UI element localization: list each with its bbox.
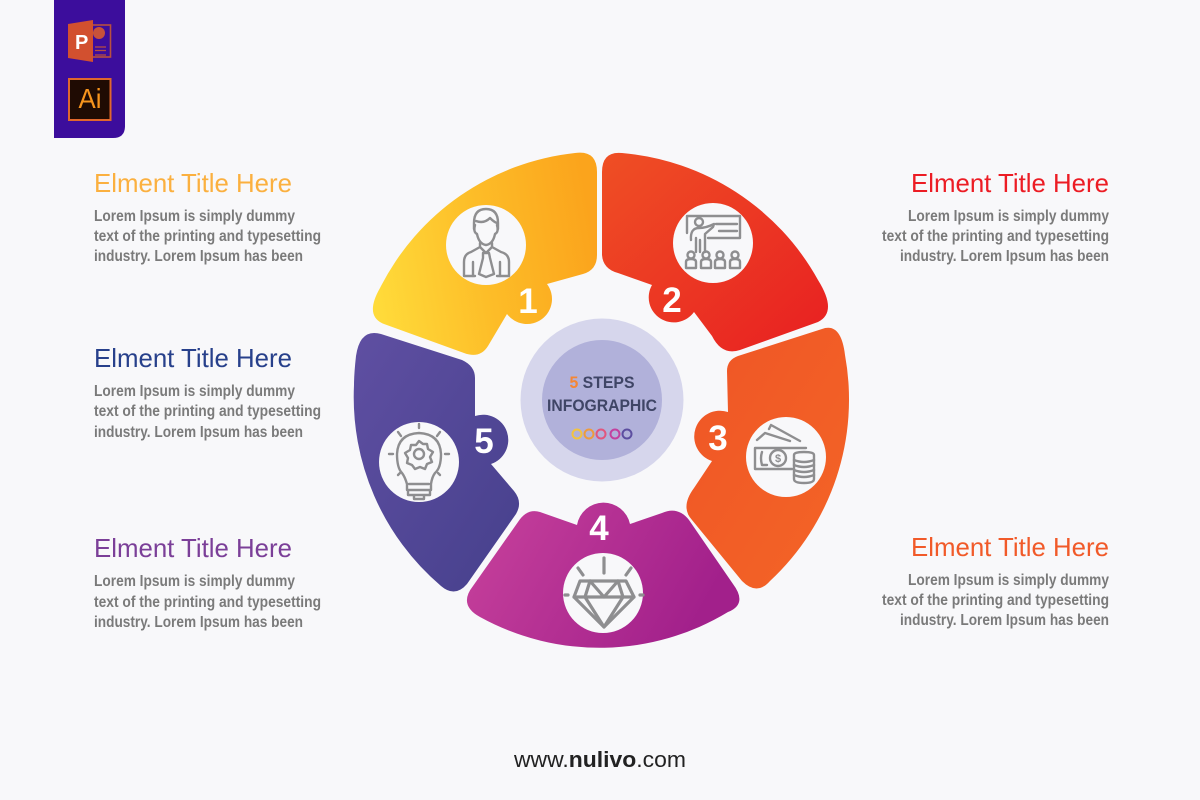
step 1 title and text: Elment Title Here bbox=[94, 168, 292, 198]
center dots bbox=[572, 430, 632, 438]
segment 4: magenta bbox=[467, 503, 739, 648]
step 3 title and text: Lorem Ipsum is simply dummy bbox=[908, 572, 1109, 589]
step 4 title and text: industry. Lorem Ipsum has been bbox=[94, 614, 303, 631]
step 3 title and text: industry. Lorem Ipsum has been bbox=[900, 612, 1109, 629]
number 5: 5 bbox=[474, 422, 494, 461]
step 2 title and text: text of the printing and typesetting bbox=[882, 228, 1109, 245]
icon: PowerPoint: P bbox=[75, 32, 88, 54]
step 4 title and text: Lorem Ipsum is simply dummy bbox=[94, 573, 295, 590]
step 1 title and text: text of the printing and typesetting bbox=[94, 228, 321, 245]
icon: diamond bbox=[565, 558, 643, 627]
step 4 title and text: Elment Title Here bbox=[94, 533, 292, 563]
header tab with software icons bbox=[54, 0, 125, 138]
number 4: 4 bbox=[589, 509, 609, 548]
number 1: 1 bbox=[518, 282, 538, 321]
step 4 title and text bbox=[94, 533, 321, 631]
center badge: INFOGRAPHIC bbox=[547, 397, 657, 415]
step 5 title and text: industry. Lorem Ipsum has been bbox=[94, 424, 303, 441]
step 3 title and text: text of the printing and typesetting bbox=[882, 592, 1109, 609]
step 3 title and text bbox=[882, 532, 1109, 629]
step 5 title and text: Lorem Ipsum is simply dummy bbox=[94, 383, 295, 400]
step 1 title and text bbox=[94, 168, 321, 265]
step 3 title and text: Elment Title Here bbox=[911, 532, 1109, 562]
step 1 title and text: Lorem Ipsum is simply dummy bbox=[94, 208, 295, 225]
center badge bbox=[520, 318, 684, 482]
step 4 title and text: text of the printing and typesetting bbox=[94, 594, 321, 611]
step 5 title and text bbox=[94, 343, 321, 441]
step 2 title and text: Lorem Ipsum is simply dummy bbox=[908, 208, 1109, 225]
icon: lightbulb bbox=[389, 424, 449, 499]
segment 5: purple bbox=[354, 333, 519, 592]
step 5 title and text: Elment Title Here bbox=[94, 343, 292, 373]
step 1 title and text: industry. Lorem Ipsum has been bbox=[94, 248, 303, 265]
number 3: 3 bbox=[708, 419, 728, 458]
step 2 title and text bbox=[882, 168, 1109, 265]
icon: presentation bbox=[686, 216, 740, 268]
step 2 title and text: industry. Lorem Ipsum has been bbox=[900, 248, 1109, 265]
center heading: 5 STEPS bbox=[570, 374, 634, 392]
segment 1: yellow bbox=[373, 153, 597, 355]
number 2: 2 bbox=[662, 281, 682, 320]
icon: money bbox=[755, 425, 814, 483]
icon: businessman bbox=[464, 209, 509, 277]
segment 3: orange bbox=[686, 328, 849, 588]
step 2 title and text: Elment Title Here bbox=[911, 168, 1109, 198]
icon: Illustrator: Ai bbox=[78, 83, 102, 114]
step 5 title and text: text of the printing and typesetting bbox=[94, 403, 321, 420]
icon: money: $ bbox=[775, 453, 781, 465]
segment 2: red bbox=[602, 153, 828, 351]
footer website: www.nulivo.com bbox=[513, 747, 686, 772]
